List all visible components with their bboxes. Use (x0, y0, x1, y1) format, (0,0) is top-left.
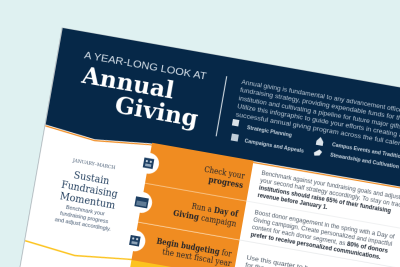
action detail: day of giving: Giving campaign. Create personalized and impactful (253, 218, 393, 248)
header band (44, 28, 400, 219)
orange action column (111, 141, 254, 267)
legend: stewardship and cultivation (313, 149, 400, 171)
action labels: Check your (204, 165, 246, 181)
action detail: day of giving: Boost donor engagement in the spring with a Day of (254, 210, 395, 241)
row separators (240, 201, 400, 267)
next section block (121, 260, 233, 267)
section heading: Sustain (73, 169, 111, 187)
header divider (216, 76, 227, 136)
action detail: day of giving (250, 210, 395, 263)
intro paragraph: fundraising strategy, providing expendable funds for the (239, 87, 400, 123)
icon: benchmark (136, 151, 161, 175)
legend: campus events and traditions (316, 136, 400, 161)
icon: campaign window (129, 190, 154, 215)
section heading: Momentum (59, 190, 116, 212)
section description: fundraising progress (59, 211, 109, 225)
intro paragraph (235, 79, 400, 152)
left column: sustain fundraising momentum (54, 157, 123, 233)
section description (54, 203, 114, 233)
action labels: Run a Day of (191, 201, 239, 219)
intro paragraph: institution and cultivating a pipeline for future major gifts. (238, 95, 400, 131)
intro paragraph: Annual giving is fundamental to any advancement office's (241, 79, 400, 115)
legend: strategic planning (231, 119, 293, 139)
action detail: check progress: institutions should raise 65% of their fundraising (258, 186, 392, 215)
action labels: progress (208, 174, 244, 190)
kicker title: A YEAR-LONG LOOK AT (83, 49, 208, 83)
icon: budgeting (123, 229, 147, 253)
main title: Annual (79, 62, 177, 105)
main title: Giving (113, 91, 200, 133)
section description: and adjust accordingly. (54, 217, 111, 233)
section heading: Fundraising (60, 179, 119, 201)
action detail: check progress: Benchmark against your fundraising goals and adjust (261, 171, 400, 201)
action detail: check progress (257, 171, 400, 225)
yellow section divider (24, 241, 132, 265)
section description: Benchmark your (65, 205, 105, 218)
action detail: check progress: your second half strategy accordingly. To stay on track, (260, 178, 400, 210)
action detail: day of giving: content for each donor segment, as 80% of donors (251, 225, 389, 255)
action labels (154, 159, 248, 267)
main title (75, 62, 204, 133)
legend: strategic planning: Strategic Planning (246, 125, 292, 139)
legend: campaigns and appeals (230, 133, 305, 155)
legend: campaigns and appeals: Campaigns and Appeals (244, 138, 304, 155)
left column: sustain fundraising momentum: JANUARY–MARCH (71, 158, 116, 171)
action detail: check progress: revenue before January 1. (257, 193, 328, 211)
intro paragraph: Utilize this infographic to guide your efforts in creating a (237, 103, 400, 139)
action detail: day of giving: prefer to receive personalized communications. (250, 232, 381, 261)
action labels: Giving campaign (173, 207, 237, 228)
action labels: Begin budgeting for (156, 236, 233, 259)
legend: stewardship and cultivation: Stewardship and Cultivation (330, 153, 399, 171)
section heading (58, 167, 121, 212)
